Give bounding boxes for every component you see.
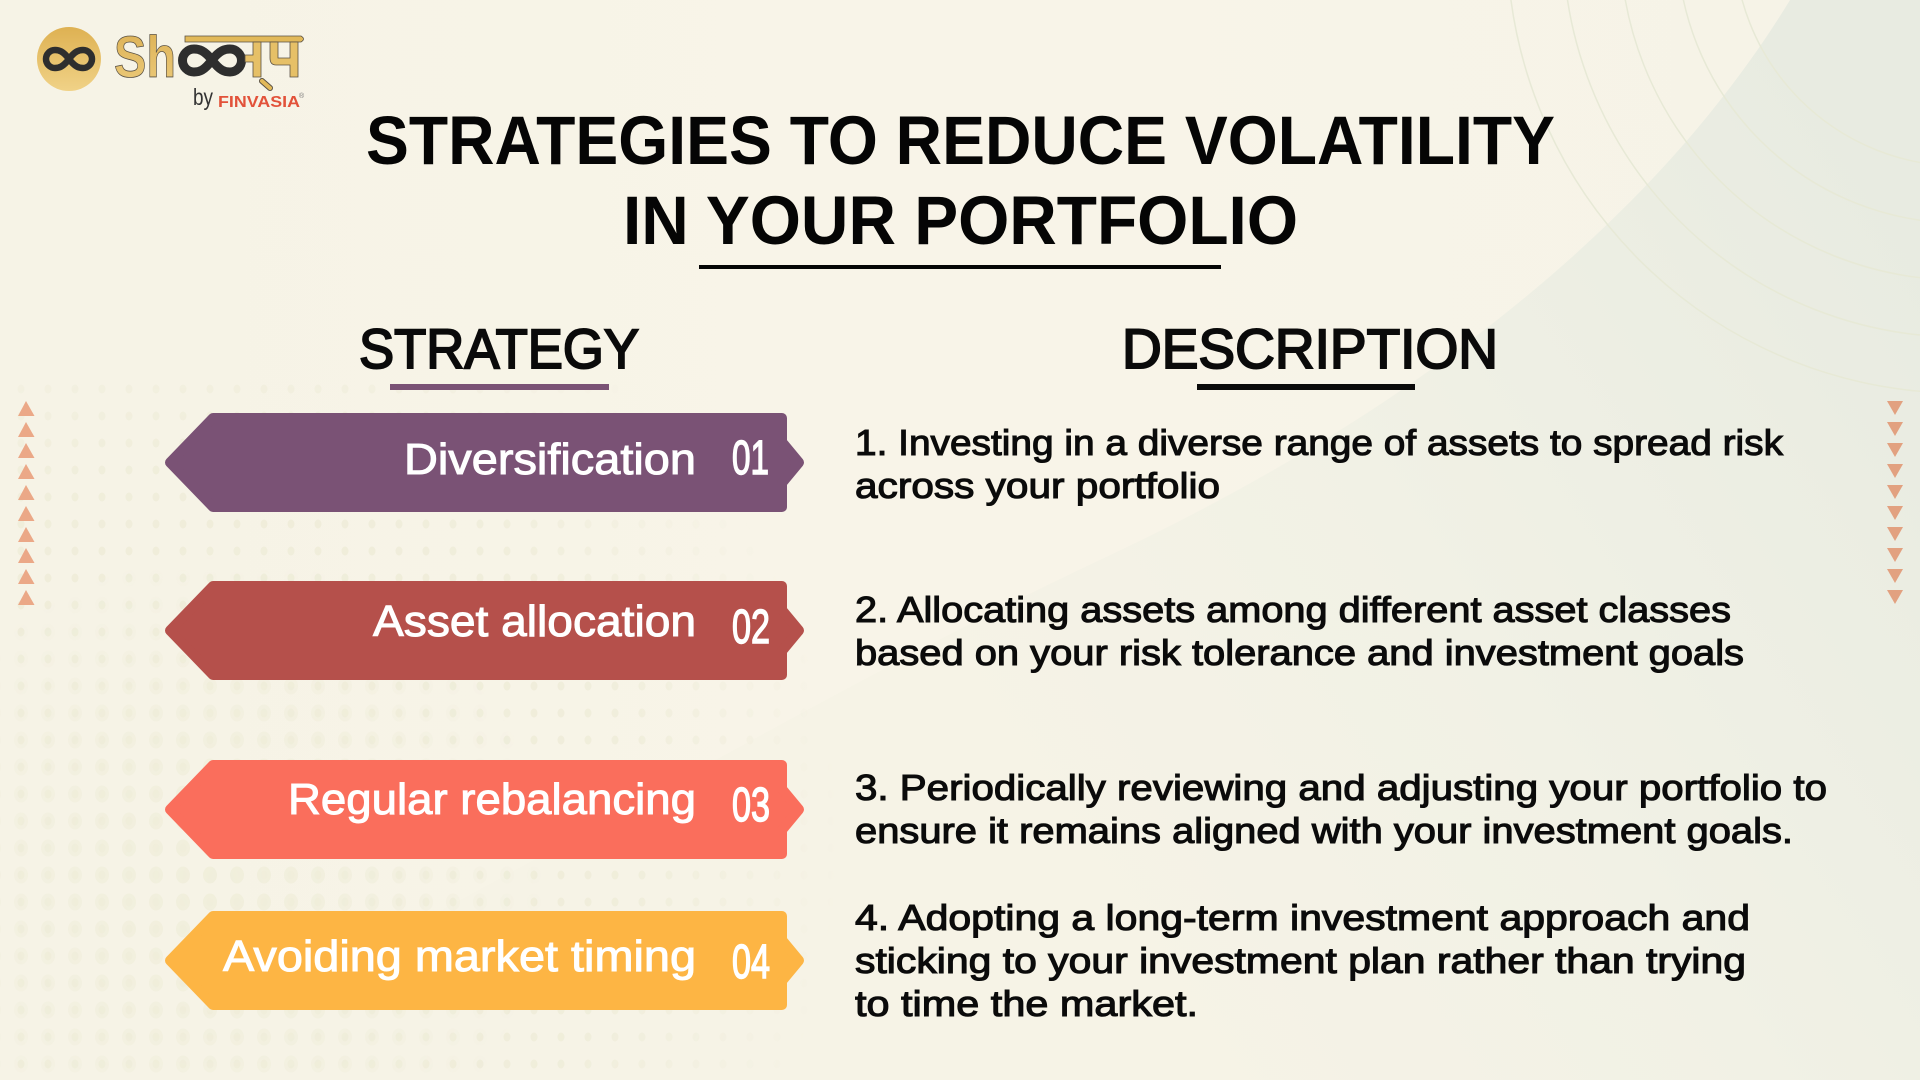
logo byline: FINVASIA <box>218 94 300 111</box>
description 3: ensure it remains aligned with your investment goals. <box>855 810 1793 851</box>
description 2: based on your risk tolerance and investment goals <box>855 632 1744 673</box>
description 1 <box>855 422 1784 506</box>
strategy 4: Avoiding market timing: Avoiding market timing <box>223 932 696 981</box>
strategy 3: Regular rebalancing <box>170 765 799 854</box>
strategy 4: Avoiding market timing <box>170 916 799 1005</box>
description 1: across your portfolio <box>855 465 1220 506</box>
description 2 <box>855 589 1744 673</box>
strategy 2: Asset allocation <box>170 586 799 675</box>
title: IN YOUR PORTFOLIO <box>623 182 1298 259</box>
description 4: to time the market. <box>855 983 1198 1024</box>
description 4: sticking to your investment plan rather than trying <box>855 940 1746 981</box>
title <box>366 102 1555 269</box>
heading: strategy: STRATEGY <box>359 317 639 380</box>
logo byline: by <box>193 84 213 110</box>
description 4: 4. Adopting a long-term investment approach and <box>855 897 1750 938</box>
strategy 1: Diversification: Diversification <box>404 435 696 484</box>
description 1: 1. Investing in a diverse range of assets to spread risk <box>855 422 1784 463</box>
decoration: down triangles <box>1887 401 1903 604</box>
strategy 1: Diversification: 01 <box>732 432 769 485</box>
logo byline <box>193 84 305 111</box>
description 3 <box>855 767 1827 851</box>
strategy 2: Asset allocation: 02 <box>732 601 770 654</box>
logo wordmark: Sh <box>114 25 176 90</box>
description 4 <box>855 897 1750 1024</box>
icon: gold circle with infinity <box>37 27 101 91</box>
strategy 1: Diversification <box>170 418 799 507</box>
description 3: 3. Periodically reviewing and adjusting your portfolio to <box>855 767 1827 808</box>
strategy 3: Regular rebalancing: Regular rebalancing <box>288 775 696 824</box>
heading: description: DESCRIPTION <box>1122 317 1498 380</box>
description 2: 2. Allocating assets among different asset classes <box>855 589 1731 630</box>
strategy 4: Avoiding market timing: 04 <box>732 936 770 989</box>
strategy 3: Regular rebalancing: 03 <box>732 779 770 832</box>
decoration: up triangles <box>18 401 34 605</box>
strategy 2: Asset allocation: Asset allocation <box>373 597 696 646</box>
logo byline: ® <box>299 92 305 100</box>
icon: logo mark infinity and top bar <box>183 36 304 88</box>
title: STRATEGIES TO REDUCE VOLATILITY <box>366 102 1555 179</box>
logo: Shoonya by Finvasia <box>37 25 305 111</box>
